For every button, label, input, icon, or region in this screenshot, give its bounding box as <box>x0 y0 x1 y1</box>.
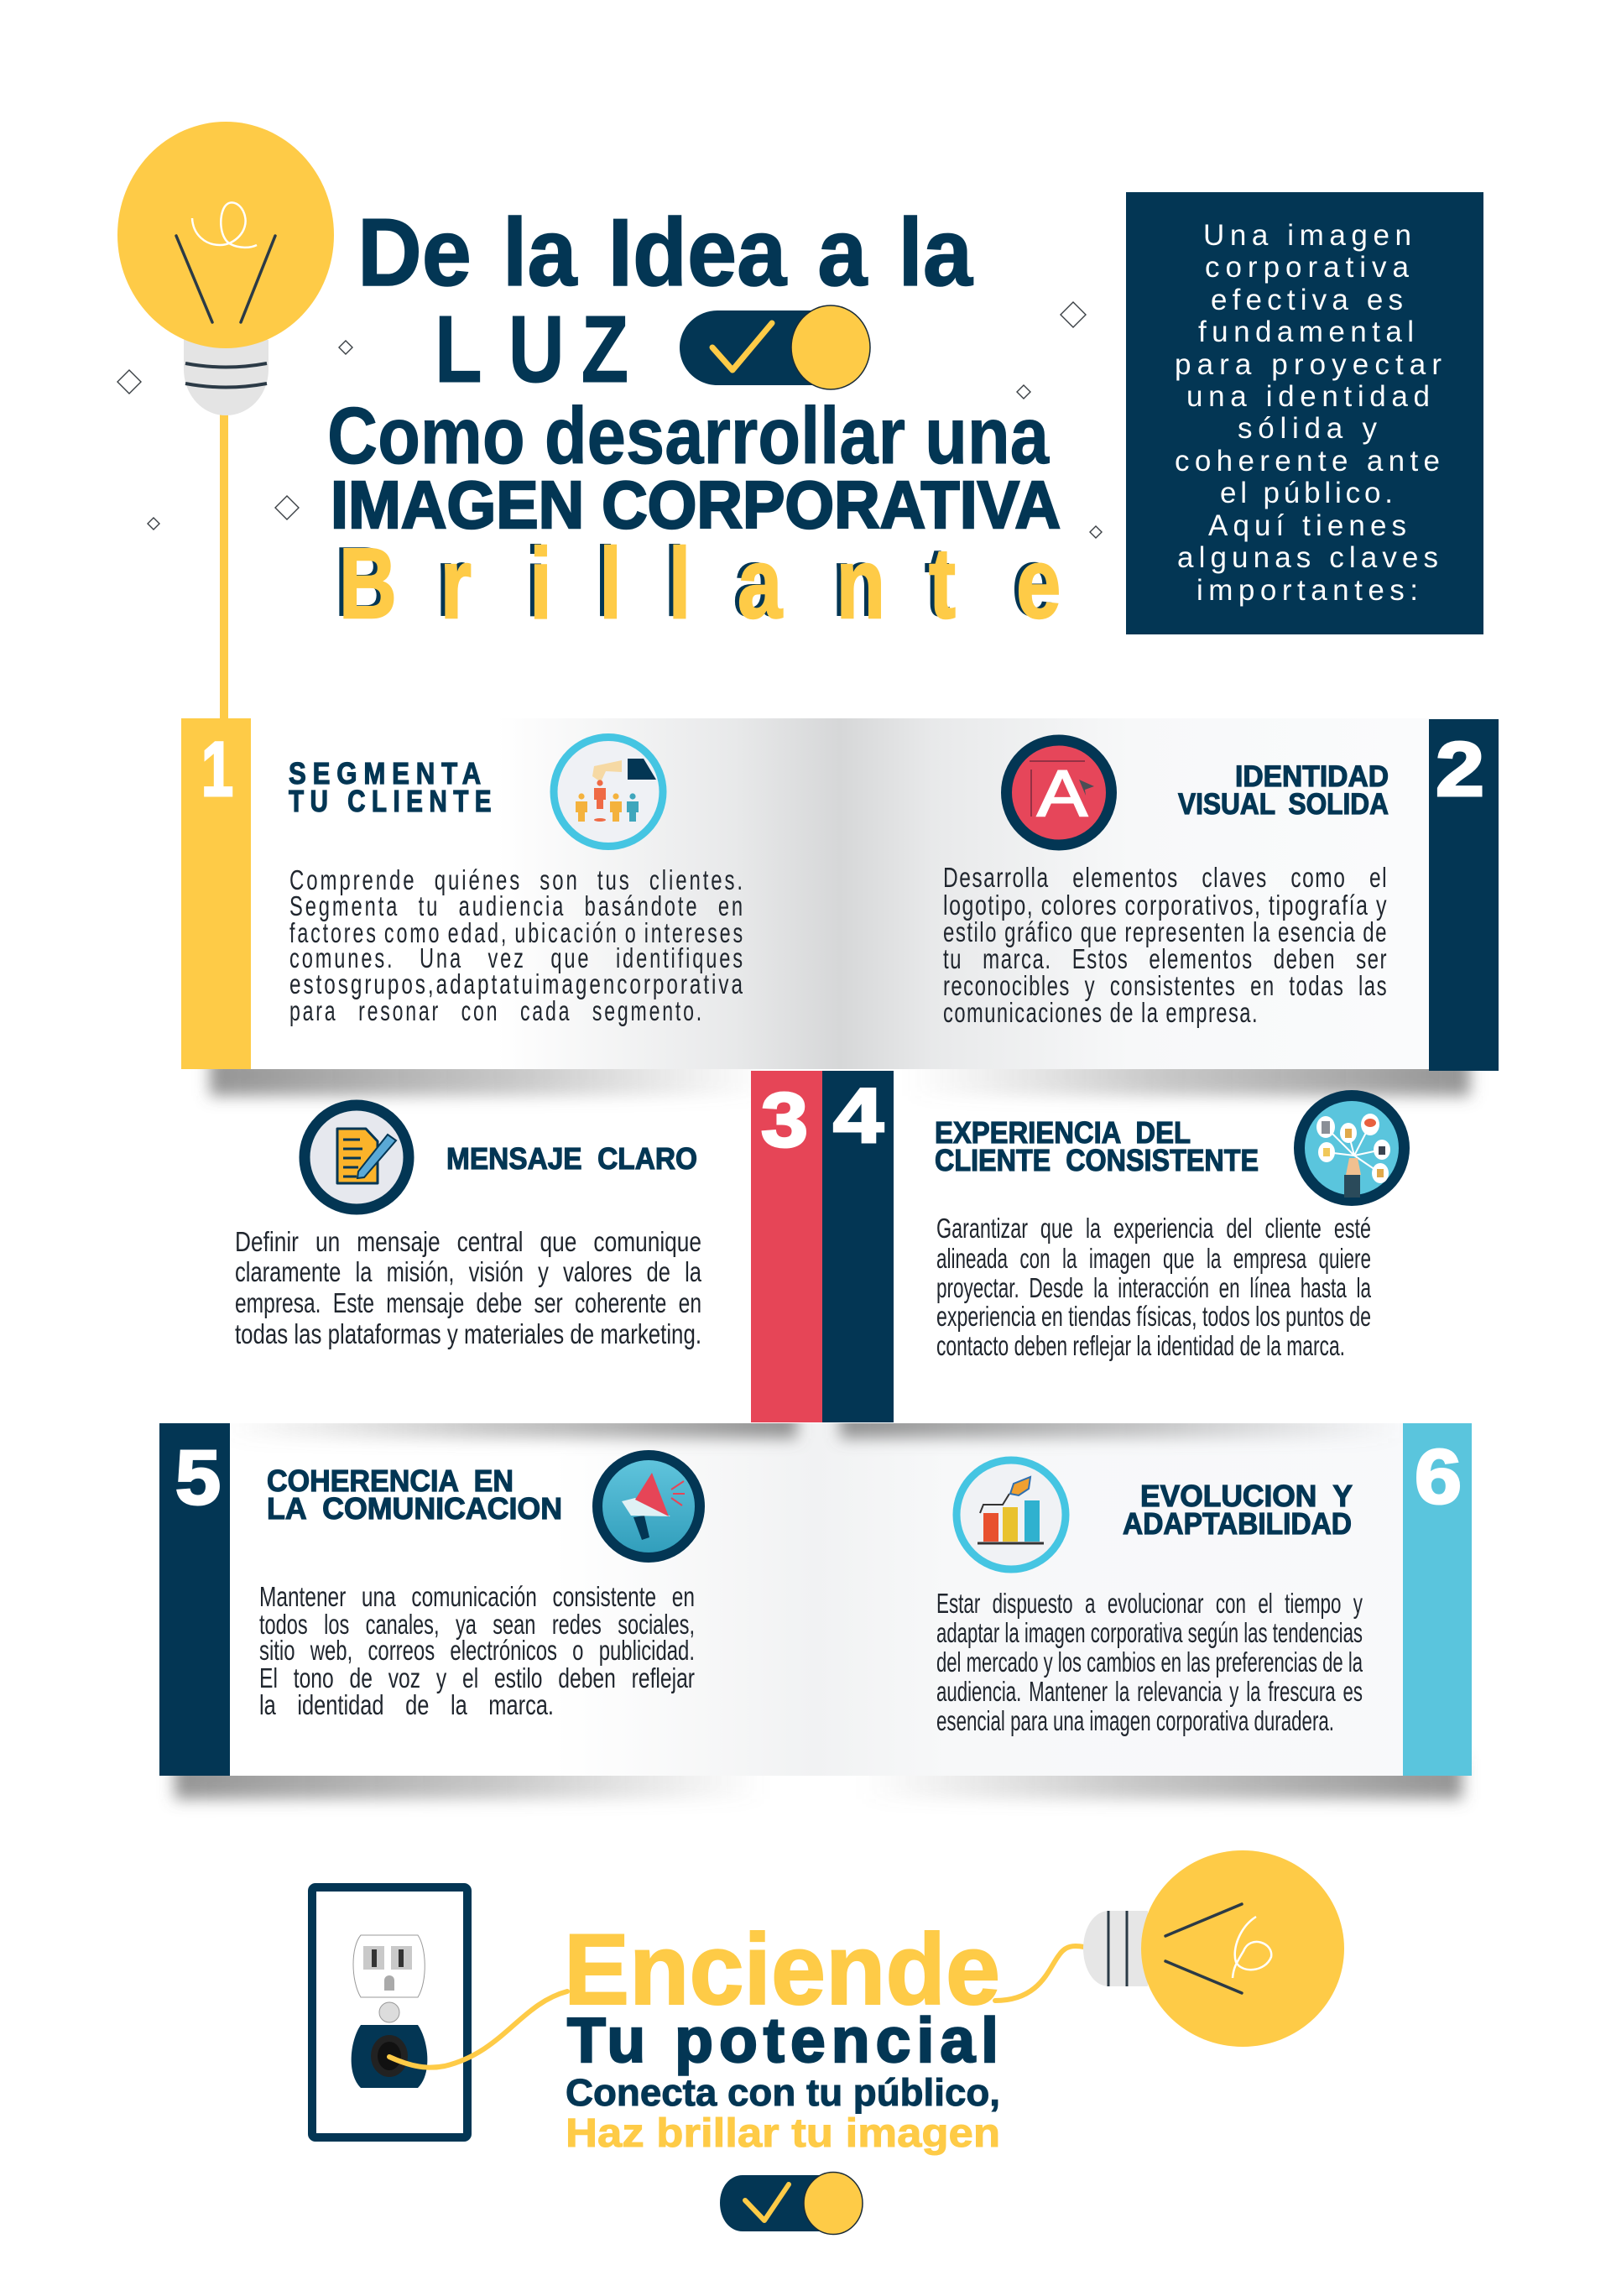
title line: IMAGEN CORPORATIVA: IMAGEN CORPORATIVA <box>331 467 1061 542</box>
text block: Experiencia: alineada con la imagen que la empresa quiere <box>936 1243 1371 1274</box>
number strip 3 <box>751 1071 822 1422</box>
number strip 6: 6 <box>1415 1434 1462 1520</box>
heading: Identidad visual solida <box>1178 760 1389 821</box>
text block: Segmenta: comunes. Una vez que identifiques <box>289 942 745 973</box>
text block: Coherencia <box>259 1581 695 1720</box>
heading: Coherencia en la comunicacion: LA COMUNICACION <box>267 1491 562 1526</box>
text block: Identidad: logotipo, colores corporativos, tipografía y <box>943 890 1388 921</box>
heading: Evolucion y adaptabilidad <box>1123 1479 1353 1541</box>
icon: wall socket <box>312 1887 467 2137</box>
text block: Segmenta <box>289 864 745 1026</box>
shadows under top panels <box>210 1054 1470 1096</box>
icon: light bulb with stem <box>117 122 334 722</box>
decorative diamonds <box>117 302 1102 538</box>
title line: Brillante: Brillante <box>339 527 1061 639</box>
heading: Segmenta tu cliente: TU CLIENTE <box>289 784 498 818</box>
title <box>327 200 1061 639</box>
title line: LUZ: LUZ <box>435 295 628 402</box>
icon: cable and bulb on the right <box>995 1850 1344 2047</box>
heading: Evolucion y adaptabilidad: ADAPTABILIDAD <box>1123 1506 1352 1541</box>
shadows of middle panels <box>267 1423 1357 1448</box>
closing heading <box>564 1913 1000 2156</box>
heading: Mensaje claro: MENSAJE CLARO <box>446 1141 697 1176</box>
panel: intro box: Aquí tienes <box>1208 509 1406 542</box>
number strip 1 <box>181 718 251 1069</box>
panel: intro box: algunas claves <box>1177 541 1438 574</box>
panel: intro box: coherente ante <box>1175 445 1440 477</box>
panel: intro box: para proyectar <box>1175 348 1442 381</box>
icon: growth chart <box>957 1460 1066 1569</box>
text block: Evolucion: esencial para una imagen corporativa duradera. <box>936 1705 1334 1736</box>
text block: Mensaje: todas las plataformas y materiales de marketing. <box>235 1318 701 1349</box>
text block: Identidad: tu marca. Estos elementos deben ser <box>943 943 1388 974</box>
panel: intro box: Una imagen <box>1203 219 1411 252</box>
icon: megaphone <box>597 1455 700 1558</box>
text block: Segmenta: para resonar con cada segmento. <box>289 995 704 1026</box>
closing line: Conecta con tu público: Conecta con tu público, <box>566 2071 1000 2114</box>
heading: Experiencia del cliente consistente <box>935 1115 1259 1177</box>
number strip 1: 1 <box>201 727 233 812</box>
text block: Experiencia: contacto deben reflejar la identidad de la marca. <box>936 1330 1345 1361</box>
text block: Mensaje: Definir un mensaje central que comunique <box>235 1226 701 1257</box>
text block: Segmenta: factores como edad, ubicación o intereses <box>289 917 745 948</box>
panel: intro box: fundamental <box>1198 316 1414 348</box>
panel: intro box: importantes: <box>1197 574 1418 607</box>
text block: Coherencia: todos los canales, ya sean redes sociales, <box>259 1609 695 1640</box>
icon: clear message <box>305 1105 409 1209</box>
number strip 2: 2 <box>1436 727 1484 812</box>
text block: Identidad: comunicaciones de la empresa. <box>943 997 1259 1028</box>
panel: intro box: efectiva es <box>1211 284 1403 316</box>
heading: Coherencia en la comunicacion: COHERENCIA EN <box>267 1464 514 1498</box>
heading: Coherencia en la comunicacion <box>267 1464 562 1526</box>
icon: visual identity <box>1007 740 1111 845</box>
text block: Experiencia <box>936 1213 1371 1361</box>
text block: Evolucion <box>936 1588 1363 1736</box>
text block: Segmenta: estosgrupos,adaptatuimagencorporativa <box>289 968 745 999</box>
text block: Identidad: reconocibles y consistentes en todas las <box>943 970 1388 1001</box>
icon: yellow cable to socket <box>389 1991 567 2068</box>
closing line: Tu potencial: Tu potencial <box>567 2005 998 2075</box>
text block: Identidad: Desarrolla elementos claves como el <box>943 862 1388 893</box>
closing line: Enciende: Enciende <box>564 1913 1000 2026</box>
number strip 4: 4 <box>833 1073 884 1159</box>
number strip 3: 3 <box>761 1078 808 1163</box>
text block: Mensaje <box>235 1226 701 1349</box>
text block: Mensaje: claramente la misión, visión y valores de la <box>235 1256 701 1287</box>
heading: Experiencia del cliente consistente: EXPERIENCIA DEL <box>935 1115 1191 1150</box>
heading: Identidad visual solida: IDENTIDAD <box>1235 760 1389 793</box>
panel: intro box: sólida y <box>1238 412 1378 445</box>
text block: Segmenta: Segmenta tu audiencia basándote en <box>289 890 745 921</box>
number strip 5: 5 <box>175 1435 221 1521</box>
text block: Experiencia: experiencia en tiendas físicas, todos los puntos de <box>936 1301 1371 1332</box>
number strip 6 <box>1403 1423 1472 1776</box>
heading: Evolucion y adaptabilidad: EVOLUCION Y <box>1140 1479 1353 1513</box>
number strip 4 <box>822 1071 894 1422</box>
heading: Identidad visual solida: VISUAL SOLIDA <box>1178 788 1389 821</box>
text block: Experiencia: proyectar. Desde la interacción en línea hasta la <box>936 1272 1371 1303</box>
panel: intro box: corporativa <box>1205 251 1410 284</box>
text block: Coherencia: la identidad de la marca. <box>259 1689 554 1720</box>
text block: Experiencia: Garantizar que la experiencia del cliente esté <box>936 1213 1371 1244</box>
title line shadow: Brillante: Brillante <box>334 525 1056 637</box>
shadows under bottom panels <box>175 1759 1462 1799</box>
icon: bottom toggle switch <box>720 2172 863 2234</box>
text block: Evolucion: del mercado y los cambios en las preferencias de la <box>936 1646 1363 1678</box>
heading: Segmenta tu cliente: SEGMENTA <box>289 756 487 791</box>
text block: Evolucion: audiencia. Mantener la relevancia y la frescura es <box>936 1676 1363 1707</box>
panel: intro box: el público. <box>1220 477 1393 509</box>
text block: Identidad: estilo gráfico que representen la esencia de <box>943 916 1388 947</box>
icon: toggle switch <box>680 305 870 389</box>
text block: Evolucion: adaptar la imagen corporativa según las tendencias <box>936 1617 1363 1648</box>
text block: Identidad <box>943 862 1388 1028</box>
text block: Mensaje: empresa. Este mensaje debe ser coherente en <box>235 1287 701 1318</box>
text block: Coherencia: Mantener una comunicación consistente en <box>259 1581 695 1612</box>
title line: Como desarrollar una: Como desarrollar una <box>327 391 1050 481</box>
text block: Segmenta: Comprende quiénes son tus clientes. <box>289 864 745 895</box>
icon: customer experience <box>1299 1096 1405 1200</box>
closing line: Haz brillar tu imagen: Haz brillar tu imagen <box>566 2111 1000 2156</box>
panel: 1 and 2 spread <box>181 718 1499 1071</box>
icon: visual identity: A <box>1037 756 1087 830</box>
panel: intro box <box>1126 192 1483 634</box>
heading: Segmenta tu cliente <box>289 756 498 818</box>
text block: Coherencia: sitio web, correos electrónicos o publicidad. <box>259 1635 695 1666</box>
panel: intro box: una identidad <box>1186 380 1430 413</box>
number strip 5 <box>159 1423 230 1776</box>
text block: Coherencia: El tono de voz y el estilo deben reflejar <box>259 1662 695 1693</box>
panel: 5 and 6 spread <box>159 1410 1472 1776</box>
icon: customer segmentation <box>554 737 663 846</box>
number strip 2 <box>1429 719 1499 1071</box>
heading: Experiencia del cliente consistente: CLIENTE CONSISTENTE <box>935 1143 1259 1177</box>
text block: Evolucion: Estar dispuesto a evolucionar con el tiempo y <box>936 1588 1363 1619</box>
panel: 3 and 4 spread <box>235 1071 1405 1422</box>
title line: De la Idea a la: De la Idea a la <box>357 200 973 306</box>
